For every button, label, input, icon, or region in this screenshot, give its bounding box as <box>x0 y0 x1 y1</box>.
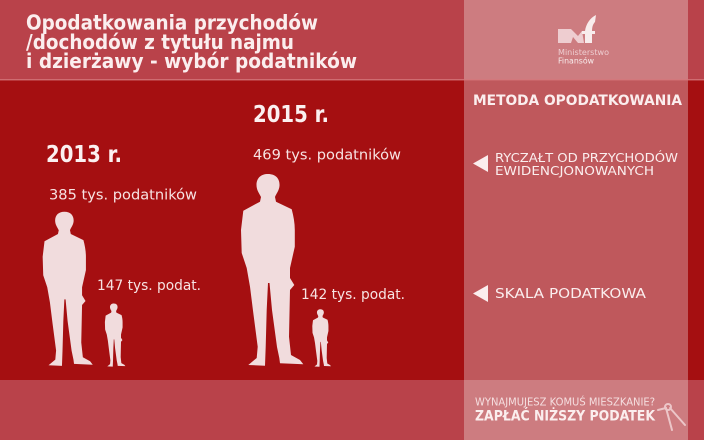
label: 469 thousand taxpayers: 469 tys. podatników <box>253 148 401 164</box>
title: i dzierżawy - wybór podatników <box>26 49 357 73</box>
arrow: tax scale <box>473 285 488 302</box>
logo: Ministerstwo Finansów: Ministerstwo <box>558 48 609 57</box>
logo: Ministerstwo Finansów <box>558 15 609 66</box>
icon: person 2015 large <box>241 174 303 366</box>
label: 142 thousand taxpayers: 142 tys. podat. <box>301 287 405 303</box>
heading: taxation method: METODA OPODATKOWANIA <box>473 93 683 109</box>
panel: bottom call to action box <box>464 380 688 440</box>
icon: person 2013 large <box>43 212 93 366</box>
panel: bottom band <box>0 380 704 440</box>
text: lump-sum tax on recorded revenue: RYCZAŁT OD PRZYCHODÓW <box>495 150 678 165</box>
text: tax scale: SKALA PODATKOWA <box>495 286 647 302</box>
label: 147 thousand taxpayers: 147 tys. podat. <box>97 278 201 294</box>
icon: person 2013 small <box>105 304 125 367</box>
arrow: lump-sum tax <box>473 155 488 172</box>
title: /dochodów z tytułu najmu <box>26 30 294 54</box>
panel: top header band <box>0 0 704 80</box>
title: Opodatkowania przychodów <box>26 10 318 34</box>
panel: right method column <box>464 80 688 380</box>
logo: Ministerstwo Finansów: Finansów <box>558 56 594 66</box>
heading: 2015: 2015 r. <box>253 102 329 128</box>
text: lump-sum tax on recorded revenue <box>495 150 678 178</box>
icon: keys <box>658 404 685 430</box>
call to action text: WYNAJMUJESZ KOMUŚ MIESZKANIE? <box>475 396 655 408</box>
icon: person 2015 small <box>312 309 331 367</box>
call to action text: ZAPŁAĆ NIŻSZY PODATEK <box>475 406 656 424</box>
title <box>26 10 357 73</box>
call to action text <box>475 396 656 424</box>
text: lump-sum tax on recorded revenue: EWIDENCJONOWANYCH <box>495 163 654 178</box>
label: 385 thousand taxpayers: 385 tys. podatników <box>49 188 197 204</box>
heading: 2013: 2013 r. <box>46 142 122 168</box>
panel: logo box <box>464 0 688 80</box>
